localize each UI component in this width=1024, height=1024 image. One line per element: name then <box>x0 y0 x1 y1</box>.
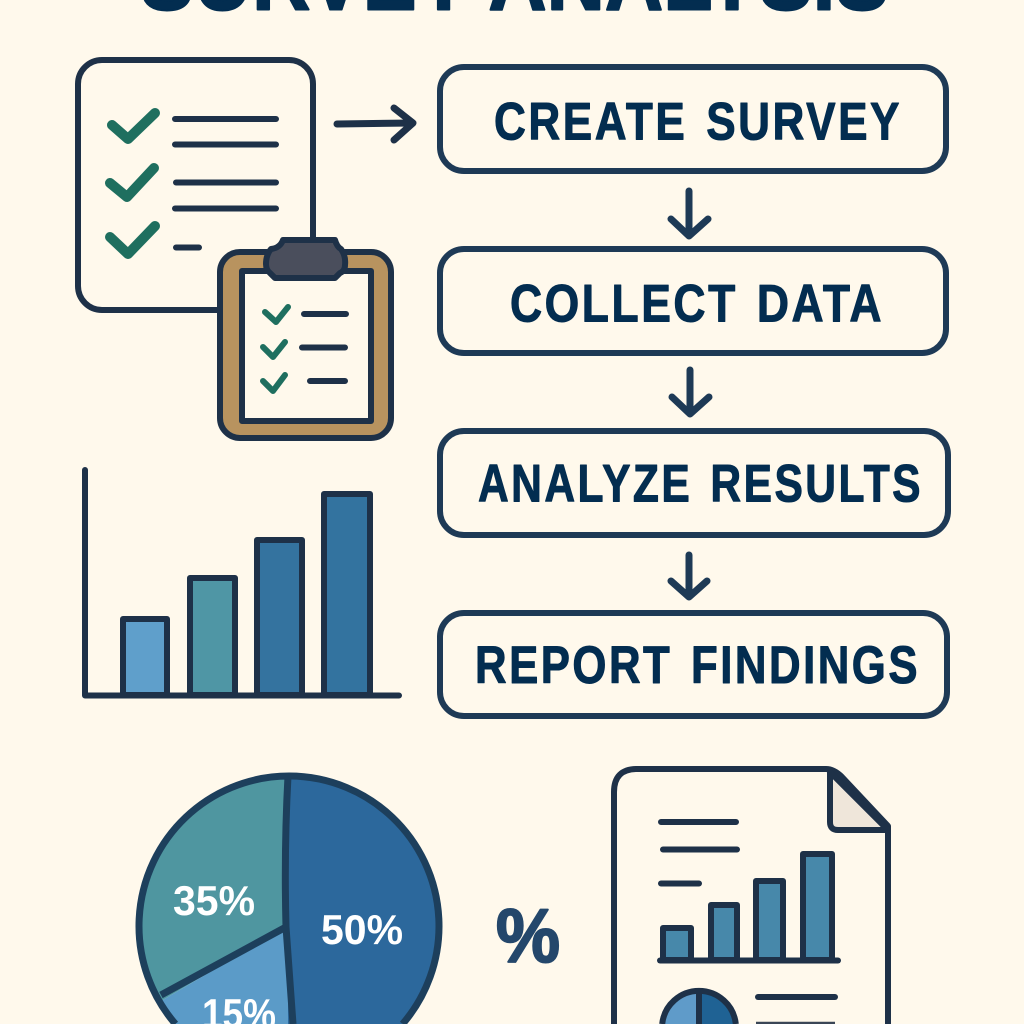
bar 2 <box>190 578 235 695</box>
flow box: report findings <box>440 613 947 716</box>
icon: survey checklist card <box>78 60 313 310</box>
slice 15% <box>161 926 288 1024</box>
arrow down 1 <box>671 191 708 236</box>
flow box: create survey <box>440 67 946 171</box>
small text lines <box>302 314 346 381</box>
check 1 <box>112 113 155 139</box>
report bar chart <box>660 854 838 960</box>
flow box: collect data <box>440 249 946 353</box>
bar 3 <box>257 540 302 695</box>
clipboard paper <box>242 271 371 421</box>
label 50%: 50% <box>321 906 403 953</box>
flow box: report findings: REPORT FINDINGS <box>475 636 920 695</box>
page fold <box>830 772 888 830</box>
flow box: analyze results: ANALYZE RESULTS <box>478 454 923 514</box>
flow box: create survey: CREATE SURVEY <box>494 92 902 152</box>
bar 4 <box>324 494 370 695</box>
pie outline and dividers <box>161 776 293 1024</box>
flow box: collect data: COLLECT DATA <box>510 274 884 334</box>
percent sign: % <box>496 894 560 979</box>
pie chart <box>139 776 439 1024</box>
arrow: checklist to create survey <box>337 108 413 140</box>
bar chart <box>85 470 399 696</box>
report text lines <box>661 822 737 884</box>
report side lines <box>756 997 835 1023</box>
check 2 <box>110 168 154 197</box>
bar 1 <box>123 619 167 695</box>
slice 35% <box>141 776 288 1001</box>
flow box: analyze results <box>440 431 948 535</box>
arrow down 2 <box>672 370 709 414</box>
report mini pie <box>662 991 736 1024</box>
arrow down 3 <box>671 555 707 597</box>
check 3 <box>110 226 155 254</box>
icon: clipboard <box>220 240 391 438</box>
checklist text lines <box>175 119 276 248</box>
small checks <box>263 307 288 391</box>
chart axes <box>85 470 399 696</box>
label 35%: 35% <box>173 877 255 924</box>
slice 50% <box>288 776 439 1024</box>
icon: report document <box>614 769 888 1024</box>
clipboard clip <box>266 240 345 278</box>
